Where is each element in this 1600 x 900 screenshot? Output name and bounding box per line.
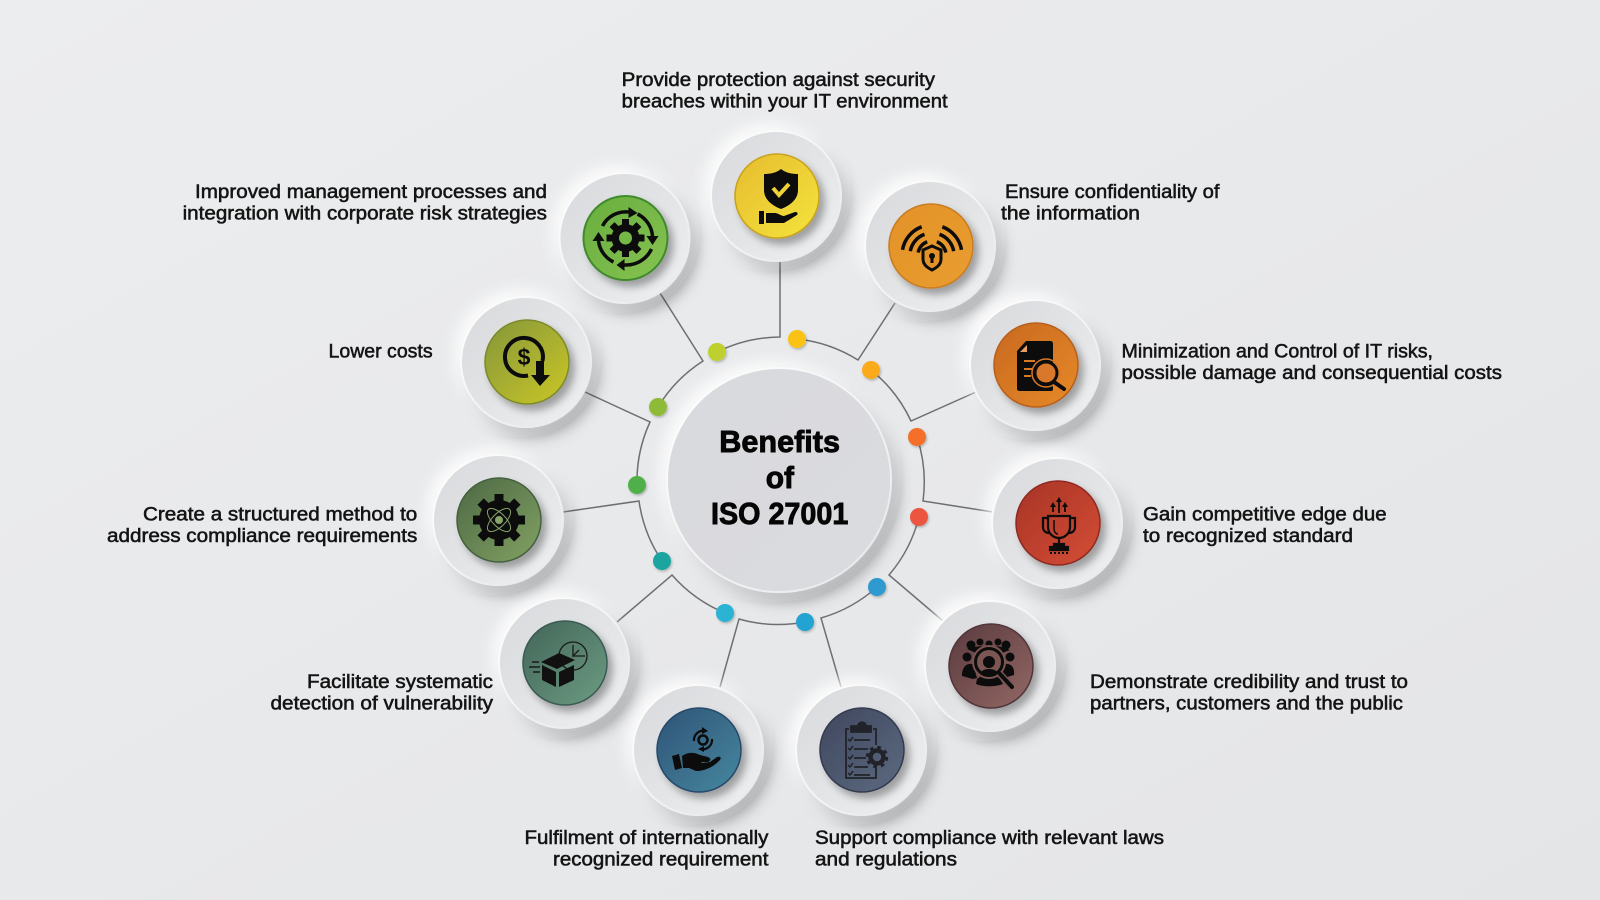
- node: wifi shield (confidentiality): [865, 181, 995, 311]
- icon: hand holding cycle: [672, 727, 721, 771]
- label: fulfilment: [524, 827, 769, 870]
- connector dots: [628, 330, 928, 631]
- label: fulfilment: recognized requirement: [553, 848, 769, 870]
- hub title: Benefits: [719, 424, 840, 459]
- node: trophy (competitive edge): [992, 458, 1122, 588]
- label: credibility: [1090, 671, 1408, 714]
- node: document search (IT risks): [970, 300, 1100, 430]
- label: structured method: address compliance requirements: [107, 525, 418, 547]
- node: shield (protection): [711, 131, 841, 261]
- label: compliance: Support compliance with relevant laws: [815, 827, 1164, 849]
- label: structured method: [107, 504, 418, 547]
- label: protection: [622, 69, 948, 112]
- label: competitive edge: Gain competitive edge due: [1143, 504, 1387, 526]
- icon: gear with cycle arrows: [592, 207, 658, 271]
- node: box with clock (vulnerability detection): [499, 598, 629, 728]
- icon: people with magnifier: [962, 638, 1014, 687]
- label: compliance: [815, 827, 1164, 870]
- label: competitive edge: [1143, 504, 1387, 547]
- node: people search (credibility): [925, 601, 1055, 731]
- label: credibility: Demonstrate credibility and trust to: [1090, 671, 1408, 693]
- label: vulnerability detection: Facilitate systematic: [307, 671, 493, 693]
- label: IT risks: possible damage and consequential costs: [1122, 362, 1502, 384]
- label: protection: Provide protection against security: [622, 69, 935, 91]
- node: gear with atom (structured method): [433, 455, 563, 585]
- label: confidentiality: the information: [1001, 202, 1140, 224]
- node: hand with cycle (fulfilment): [633, 685, 763, 815]
- label: credibility: partners, customers and the public: [1090, 692, 1403, 714]
- hub title: ISO 27001: [711, 496, 848, 531]
- node: gear cycle (management): [560, 173, 690, 303]
- label: management: Improved management processes and: [195, 181, 547, 203]
- label: management: integration with corporate risk strategies: [183, 202, 547, 224]
- icon: shield on hand: [759, 169, 798, 224]
- label: lower costs: Lower costs: [328, 340, 433, 362]
- label: confidentiality: Ensure confidentiality of: [1005, 181, 1220, 203]
- label: IT risks: [1122, 340, 1502, 384]
- central hub: Benefits of ISO 27001: [667, 368, 891, 592]
- hub title: of: [766, 460, 795, 495]
- icon: clipboard with gear: [846, 722, 886, 778]
- label: management: [183, 181, 547, 224]
- label: vulnerability detection: detection of vulnerability: [270, 692, 493, 714]
- hub title: [711, 424, 848, 531]
- node: clipboard gear (compliance): [796, 685, 926, 815]
- icon: wifi shield: [902, 227, 962, 270]
- label: vulnerability detection: [270, 671, 493, 714]
- connector lines: [563, 260, 993, 687]
- icon: box with clock: [529, 642, 587, 687]
- icon: dollar with down arrow: $: [518, 344, 531, 370]
- icon: gear with atom: [473, 494, 525, 546]
- label: structured method: Create a structured method to: [143, 504, 417, 526]
- icon: document with magnifier: [1017, 341, 1064, 391]
- label: compliance: and regulations: [815, 848, 957, 870]
- label: protection: breaches within your IT environment: [622, 90, 948, 112]
- node: dollar down (lower costs): [461, 297, 591, 427]
- label: fulfilment: Fulfilment of internationally: [524, 827, 769, 849]
- label: IT risks: Minimization and Control of IT risks,: [1122, 340, 1433, 362]
- icon: trophy with arrows: [1043, 497, 1075, 553]
- label: competitive edge: to recognized standard: [1143, 525, 1353, 547]
- label: confidentiality: [1001, 181, 1220, 224]
